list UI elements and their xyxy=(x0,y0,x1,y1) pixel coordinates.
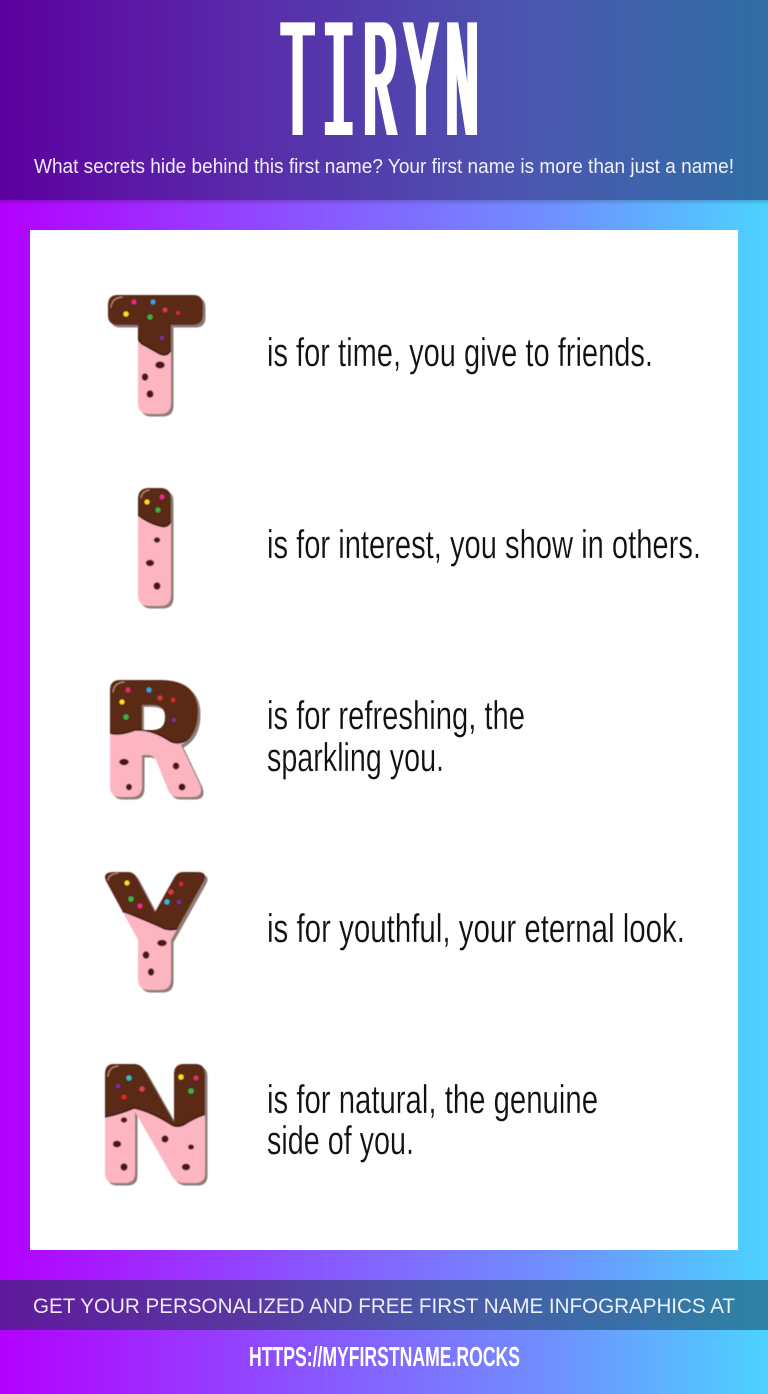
icon: chocolate letter I xyxy=(137,487,174,610)
footer band xyxy=(0,1280,768,1330)
text: N lines xyxy=(267,1078,598,1163)
text: R lines: sparkling you. xyxy=(267,736,444,780)
text: R lines xyxy=(267,694,525,780)
footer url: HTTPS://MYFIRSTNAME.ROCKS xyxy=(249,1341,520,1372)
text: N lines: is for natural, the genuine xyxy=(267,1078,598,1122)
icon: chocolate letter Y xyxy=(104,871,208,994)
icon: chocolate letter R xyxy=(109,679,204,800)
icon: chocolate letter N xyxy=(100,1058,212,1186)
subtitle: What secrets hide behind this first name? Your first name is more than just a name! xyxy=(34,156,734,178)
header band xyxy=(0,0,768,205)
footer text: GET YOUR PERSONALIZED AND FREE FIRST NAME INFOGRAPHICS AT xyxy=(33,1295,735,1318)
icon: chocolate letter T xyxy=(107,294,206,418)
text: N lines: side of you. xyxy=(267,1119,414,1163)
text: R lines: is for refreshing, the xyxy=(267,694,525,738)
white content panel xyxy=(30,230,738,1250)
